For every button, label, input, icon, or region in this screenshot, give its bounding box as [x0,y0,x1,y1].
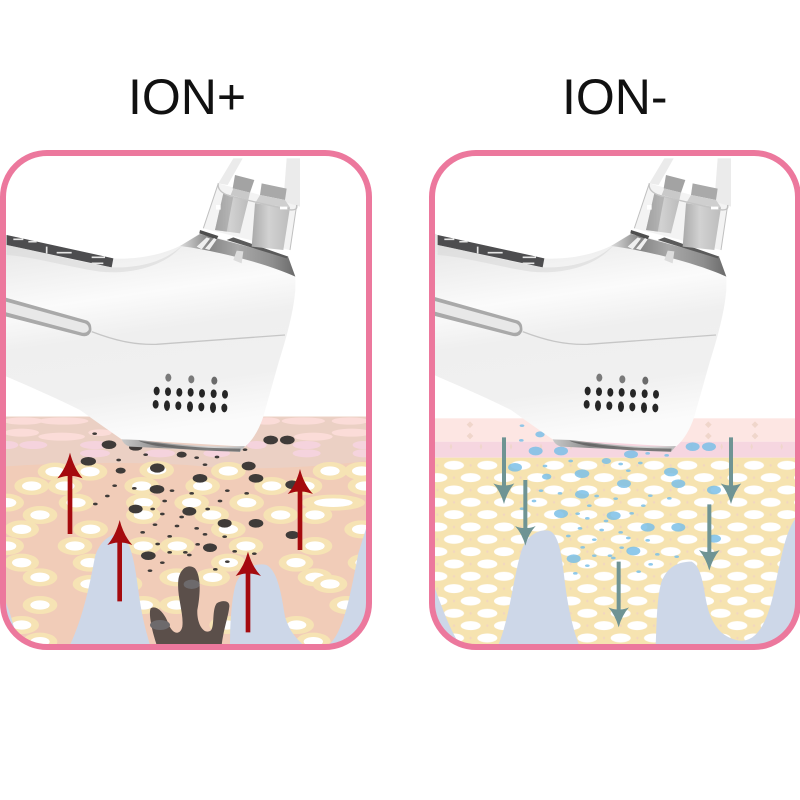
ion particles [508,424,721,575]
melanin particles [81,432,299,572]
panel: ION+ [0,153,382,651]
melanin deposit [150,566,229,645]
skin layers: ION+ [0,417,382,651]
arrows: ION- downward [493,437,741,627]
panel border: ION+ [3,153,369,647]
tissue bumps: ION- [434,519,795,645]
arrows: ION+ upward [57,453,313,632]
title: ION-: ION- [562,69,668,125]
title: ION+: ION+ [128,69,246,125]
tissue bumps: ION+ [5,527,367,645]
device: ION+ handpiece [0,158,300,452]
device: ION- handpiece [424,158,731,452]
panel: ION- [424,153,800,648]
panel border: ION- [432,153,798,647]
skin layers: ION- [425,418,800,648]
